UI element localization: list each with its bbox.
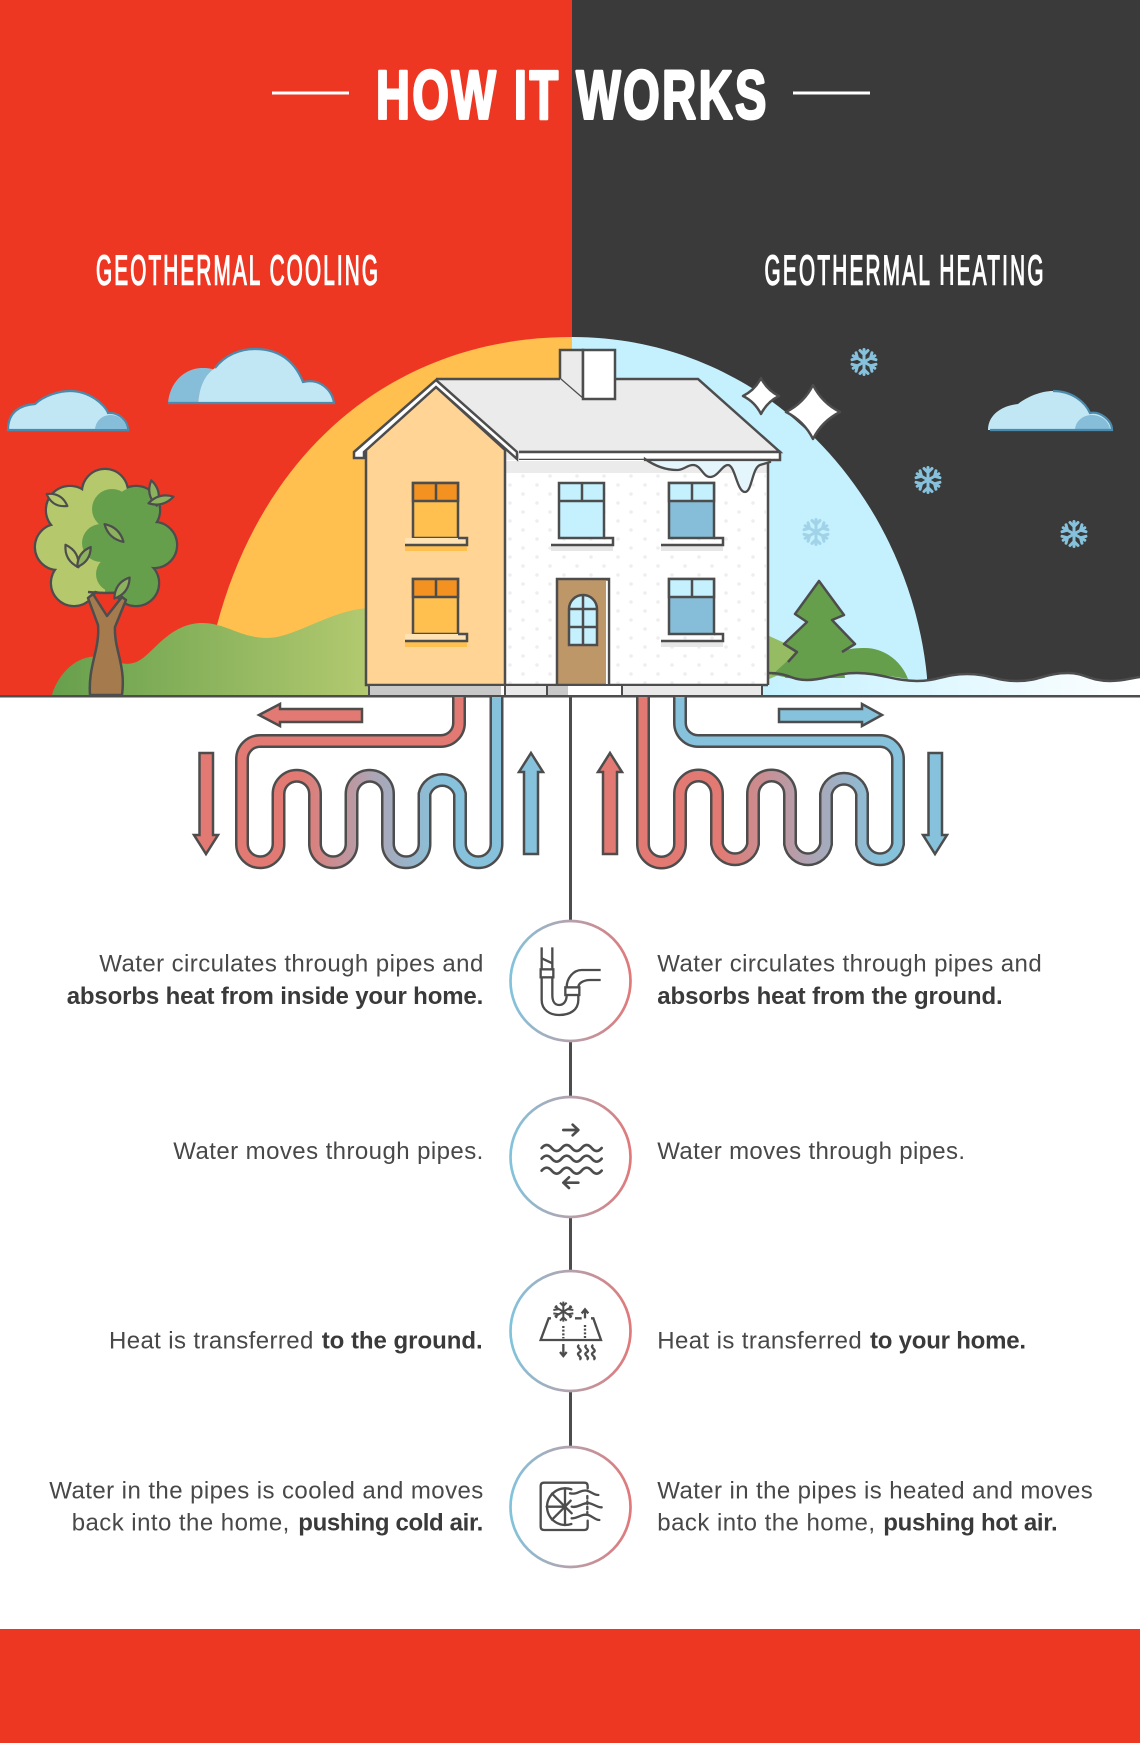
step 1 left text [67,951,483,1010]
title line left [272,92,349,94]
snowflakes [803,350,1087,546]
pipe red segment [242,697,459,800]
window middle upper [551,483,613,551]
step 1 right text: absorbs heat from the ground. [657,983,1003,1010]
door window [569,595,597,645]
cloud left large [168,349,334,403]
step 4 left text: Water in the pipes is cooled and moves [49,1477,483,1504]
step 1 left text: Water circulates through pipes and [99,951,483,978]
sparkle small [743,378,779,414]
step 2 left text: Water moves through pipes. [173,1138,483,1165]
title: HOW IT WORKS [376,57,766,134]
icon: drain pipe [541,947,601,1015]
house [354,350,780,696]
window right upper [661,483,723,551]
step 1 right text [657,951,1042,1010]
light green slope right [767,635,800,680]
step 4 right text: back into the home, [657,1510,875,1537]
sparkle large [786,385,840,439]
cold dome cool half [572,337,927,696]
arrow down red [194,753,218,854]
foundation [369,685,762,696]
wall dot pattern [507,473,766,685]
step 3 right bold text: to your home. [870,1327,1026,1354]
arrow left pointing [259,704,362,726]
tree [35,469,177,695]
wedge under gable trim [505,446,519,462]
tree crown bottom line [88,592,125,593]
door [557,579,609,685]
step 3 right text: Heat is transferred [657,1327,862,1354]
panel: heating dark background [572,0,1140,696]
cloud right [988,391,1112,430]
step 4 left text: pushing cold air. [298,1510,483,1537]
step 4 right text: Water in the pipes is heated and moves [657,1477,1093,1504]
step 1 circle [510,921,630,1041]
pipe blue segment [680,697,898,800]
tree crown dark [82,487,176,605]
white wall [505,460,768,685]
step 3 circle [510,1271,630,1391]
arrow right pointing [779,704,882,726]
icon: air exchanger [541,1483,602,1530]
pipes right [643,697,898,863]
tree crown outline [35,469,177,606]
icon: water flow [542,1125,602,1188]
step 1 left text: absorbs heat from inside your home. [67,983,483,1010]
title line right [793,92,870,94]
window left lower [405,579,467,647]
pipe gradient segment [643,697,898,863]
cloud left small [8,391,128,430]
gable trim [354,380,517,459]
roof outline [436,379,780,452]
fascia [517,452,780,460]
ground line [0,695,1140,698]
arrow down blue [923,753,947,854]
tree leaves [44,479,175,601]
pipe outline [643,697,898,863]
step 2 right text: Water moves through pipes. [657,1138,965,1165]
green hill left [52,608,369,696]
step 1 right text: Water circulates through pipes and [657,951,1042,978]
chimney white face [583,350,615,399]
pipe outline [242,697,496,862]
step 4 left text [49,1477,483,1537]
sun dome warm half [217,337,572,696]
pipes left [242,697,496,862]
heading: geothermal heating: GEOTHERMAL HEATING [764,247,1044,293]
icon: heat transfer [541,1302,601,1360]
pine tree outline [784,581,855,662]
step 4 left text: back into the home, [72,1510,289,1537]
chimney [560,350,583,399]
step 2 circle [510,1097,630,1217]
step 3 left bold text: to the ground. [322,1327,483,1354]
arrow up blue [519,753,543,854]
step 4 right text: pushing hot air. [883,1510,1058,1537]
step 3 left text: Heat is transferred [109,1327,313,1354]
wall shadow band [505,461,768,473]
snow ground [768,673,1140,696]
white page background [0,696,1140,1743]
step 4 circle [510,1447,630,1567]
tree trunk [88,594,126,695]
roof [436,379,780,452]
gable wall [366,387,505,685]
window right lower [661,579,723,647]
panel: cooling red background [0,0,572,696]
icicles [645,459,770,492]
pipe gradient segment [242,697,496,862]
footer band [0,1629,1140,1743]
snow wave line [768,673,1140,681]
pine tree [784,581,855,678]
step 4 right text [657,1477,1093,1537]
arrow up red [598,753,622,854]
tree crown fill [36,470,156,605]
heading: geothermal cooling: GEOTHERMAL COOLING [96,247,378,293]
wall outline right [505,462,768,685]
green hill right [772,648,908,680]
window left upper [405,483,467,551]
center timeline [569,697,572,1447]
